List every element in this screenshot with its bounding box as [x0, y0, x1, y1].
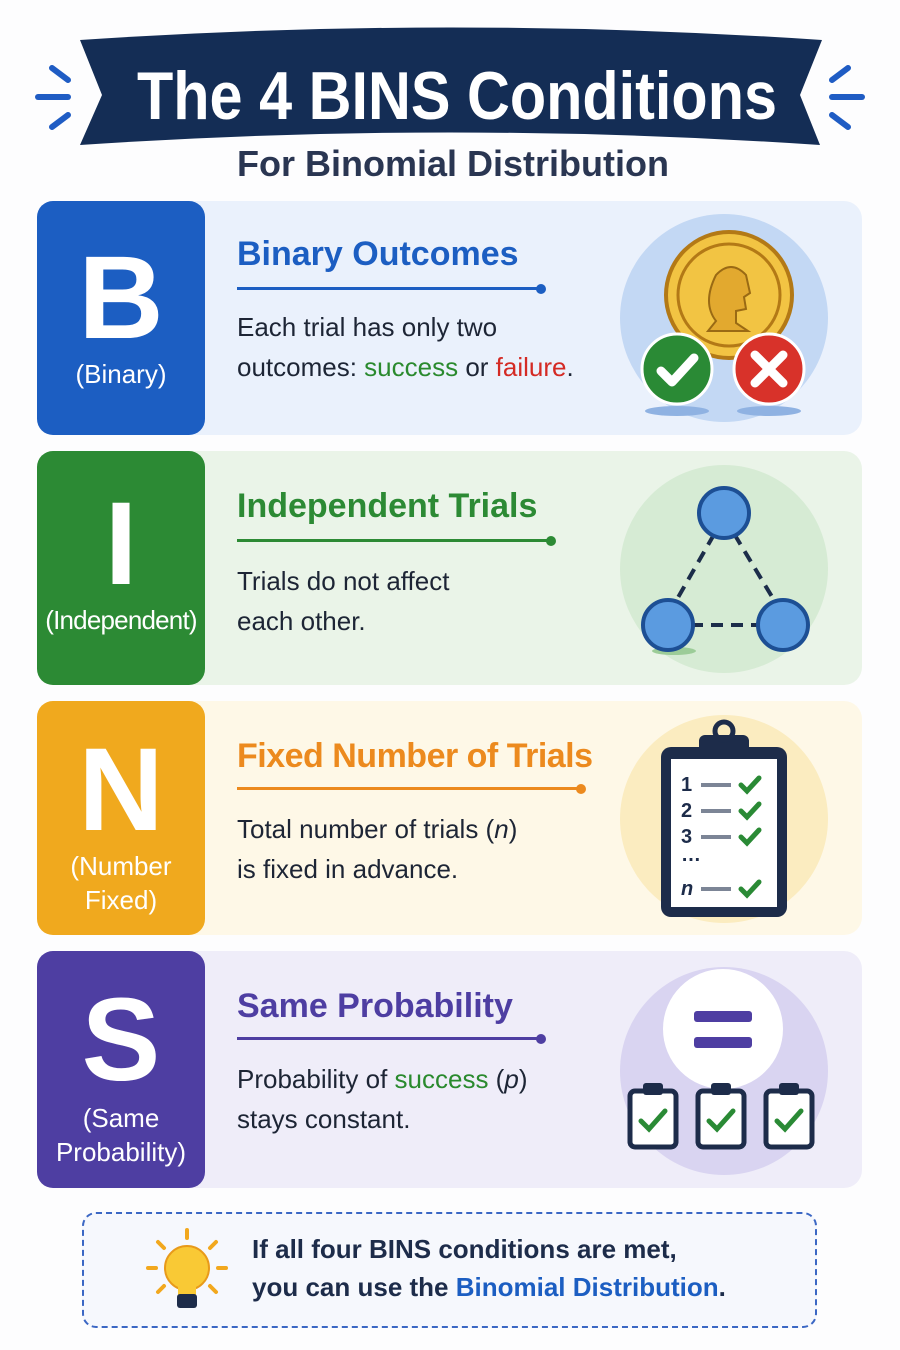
letter box B: (Binary): [75, 359, 166, 389]
text: [237, 814, 517, 884]
text: [237, 566, 450, 636]
icon: clipboard checklist: [620, 715, 828, 923]
letter box N: N: [78, 724, 164, 856]
title banner: The 4 BINS Conditions: [137, 58, 777, 134]
text: Trials do not affect: [237, 566, 449, 596]
text: Each trial has only two: [237, 312, 497, 342]
icon: equals with clipboards: [620, 967, 828, 1175]
text: If all four BINS conditions are met,: [252, 1234, 677, 1264]
heading: Fixed Number of Trials: [237, 737, 593, 775]
panel: I independent: [37, 451, 862, 685]
letter box N: (Number: [70, 851, 172, 881]
icon: clipboard checklist: n: [681, 878, 693, 900]
letter box S: Probability): [56, 1137, 186, 1167]
title banner: [35, 28, 865, 145]
icon: network triangle: [620, 465, 828, 673]
letter box I: I: [105, 478, 137, 610]
panel: S same probability: [37, 951, 862, 1188]
panel: N number fixed: [37, 701, 862, 935]
text: outcomes: success or failure.: [237, 352, 574, 382]
letter box N: Fixed): [85, 885, 157, 915]
panel: B binary: [37, 201, 862, 435]
text: Probability of success (p): [237, 1064, 527, 1094]
text: [237, 1064, 527, 1134]
letter box N: [37, 701, 205, 935]
icon: light bulb: [146, 1228, 228, 1308]
text: Total number of trials (n): [237, 814, 517, 844]
text: [252, 1234, 726, 1302]
heading: Binary Outcomes: [237, 235, 519, 273]
heading: Same Probability: [237, 987, 513, 1025]
icon: clipboard checklist: 2: [681, 800, 692, 822]
letter box S: [37, 951, 205, 1188]
text: is fixed in advance.: [237, 854, 458, 884]
text: stays constant.: [237, 1104, 410, 1134]
text: you can use the Binomial Distribution.: [252, 1272, 726, 1302]
letter box S: S: [82, 974, 160, 1106]
icon: clipboard checklist: …: [681, 844, 701, 866]
callout: footer note: [82, 1212, 817, 1328]
text: each other.: [237, 606, 366, 636]
letter box B: [37, 201, 205, 435]
heading: Independent Trials: [237, 487, 537, 525]
text: [237, 312, 574, 382]
icon: clipboard checklist: 3: [681, 826, 692, 848]
letter box I: (Independent): [45, 605, 197, 635]
icon: coin with check and cross: [620, 214, 828, 422]
letter box I: [37, 451, 205, 685]
subtitle: For Binomial Distribution: [237, 143, 669, 184]
letter box B: B: [78, 232, 164, 364]
icon: clipboard checklist: 1: [681, 774, 692, 796]
letter box S: (Same: [83, 1103, 159, 1133]
